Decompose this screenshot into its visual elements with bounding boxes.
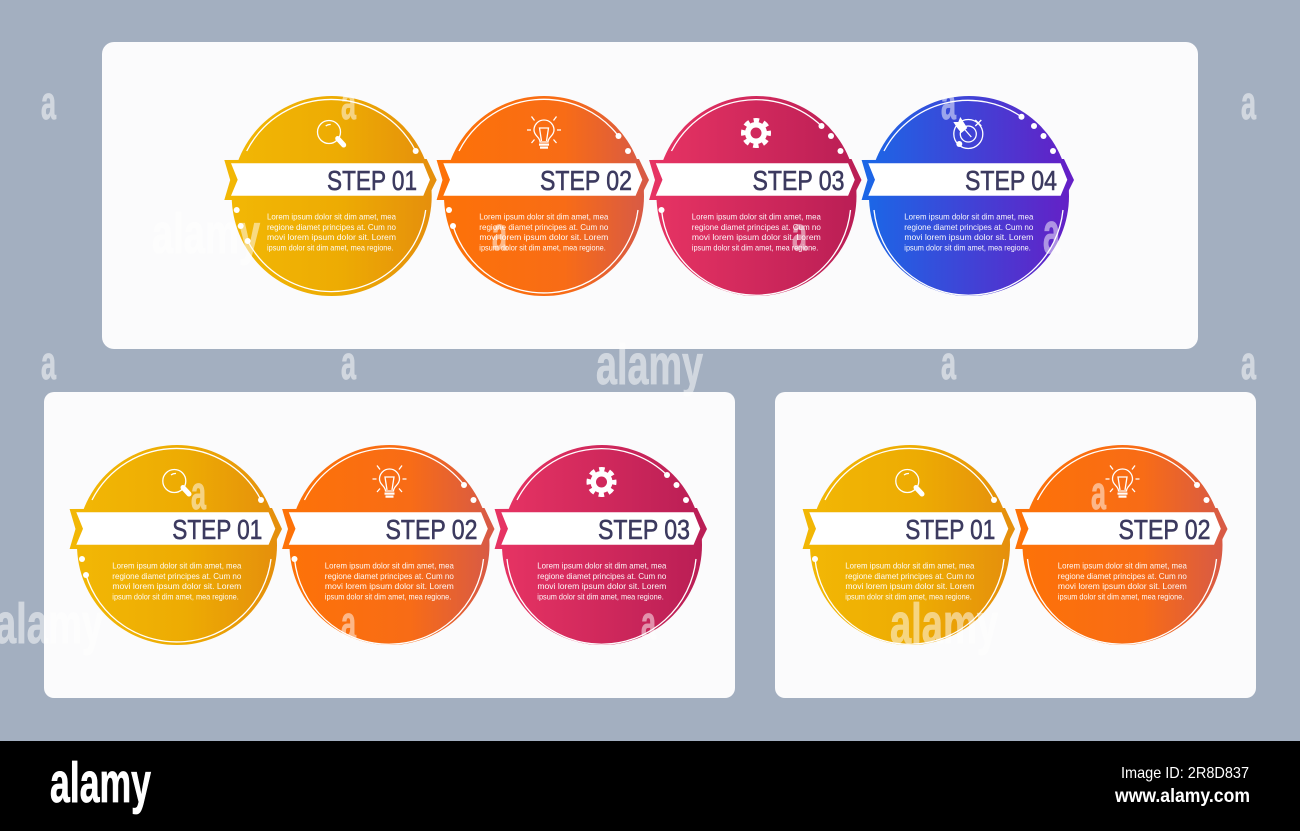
body text: ipsum dolor sit dim amet, mea regione. [845,592,972,602]
watermarks: alamy [152,202,260,266]
body text: regione diamet principes at. Cum no [692,223,821,232]
body text: ipsum dolor sit dim amet, mea regione. [267,244,394,252]
step label: STEP 02 [386,514,478,545]
step label: STEP 01 [905,514,995,545]
panel: two steps [775,392,1256,698]
footer logo: alamy [50,751,151,815]
body text: movi lorem ipsum dolor sit. Lorem [325,582,454,591]
step label: STEP 03 [598,514,690,545]
body text: regione diamet principes at. Cum no [845,572,975,581]
icon: light bulb [1106,466,1140,498]
step label: STEP 02 [1118,514,1210,545]
watermarks: a [341,336,356,389]
watermarks: a [191,466,206,519]
step label: STEP 01 [172,514,262,545]
body text: movi lorem ipsum dolor sit. Lorem [904,233,1033,242]
watermarks: a [1091,466,1106,519]
step 03 of three [495,445,707,645]
step 02 of four [437,96,649,296]
step 01 of four [224,96,437,296]
footer bar [0,741,1300,831]
step 04 of four [862,96,1074,296]
body text: movi lorem ipsum dolor sit. Lorem [537,582,666,591]
watermarks: a [341,76,356,129]
body text [904,212,1034,252]
body text: ipsum dolor sit dim amet, mea regione. [904,244,1031,252]
step label: STEP 04 [965,165,1057,196]
panel: three steps [44,392,735,698]
icon: light bulb [372,466,406,498]
body text: ipsum dolor sit dim amet, mea regione. [479,244,606,252]
watermarks: alamy [890,592,998,656]
body text [537,562,667,602]
watermarks: a [341,596,356,649]
body text: movi lorem ipsum dolor sit. Lorem [692,233,821,242]
body text: Lorem ipsum dolor sit dim amet, mea [692,212,821,222]
body text: Lorem ipsum dolor sit dim amet, mea [537,562,667,570]
body text: ipsum dolor sit dim amet, mea regione. [112,592,239,602]
watermarks: a [792,207,807,260]
watermarks: a [941,336,956,389]
watermarks: a [1043,201,1060,266]
step 01 of three [70,445,282,645]
watermarks: a [1241,76,1256,129]
step 02 of two [1015,445,1228,645]
step label: STEP 03 [752,165,844,196]
body text: ipsum dolor sit dim amet, mea regione. [325,592,451,602]
icon: gear [589,470,614,494]
body text [325,562,454,602]
body text [267,212,396,252]
watermarks: a [41,76,56,129]
body text: regione diamet principes at. Cum no [267,223,396,232]
body text: regione diamet principes at. Cum no [479,223,609,232]
watermarks: a [492,207,507,260]
body text: Lorem ipsum dolor sit dim amet, mea [904,212,1034,222]
body text: regione diamet principes at. Cum no [904,223,1034,232]
body text: regione diamet principes at. Cum no [1058,572,1187,581]
body text: movi lorem ipsum dolor sit. Lorem [1058,582,1187,591]
body text: regione diamet principes at. Cum no [325,572,454,581]
step label: STEP 02 [540,165,632,196]
icon: magnifier [163,470,189,494]
icon: target with arrow [953,117,983,148]
body text [479,212,609,252]
body text: movi lorem ipsum dolor sit. Lorem [267,233,396,242]
watermarks: a [41,336,56,389]
body text: movi lorem ipsum dolor sit. Lorem [845,582,974,591]
icon: magnifier [318,120,344,145]
watermarks: a [941,76,956,129]
icon: light bulb [527,116,561,149]
body text: ipsum dolor sit dim amet, mea regione. [1058,592,1184,602]
icon: gear [744,120,768,146]
body text [845,562,975,602]
body text: regione diamet principes at. Cum no [112,572,242,581]
body text: ipsum dolor sit dim amet, mea regione. [537,592,664,602]
body text: Lorem ipsum dolor sit dim amet, mea [1058,562,1187,570]
body text: ipsum dolor sit dim amet, mea regione. [692,244,818,252]
body text: Lorem ipsum dolor sit dim amet, mea [325,562,454,570]
watermarks [0,76,1256,656]
body text: Lorem ipsum dolor sit dim amet, mea [267,212,396,222]
body text: movi lorem ipsum dolor sit. Lorem [479,233,608,242]
icon: magnifier [896,470,922,494]
body text [692,212,821,252]
body text: Lorem ipsum dolor sit dim amet, mea [479,212,609,222]
body text [1058,562,1187,602]
image id: Image ID: 2R8D837 [1121,765,1249,782]
body text: Lorem ipsum dolor sit dim amet, mea [112,562,242,570]
step label: STEP 01 [327,165,417,196]
body text [112,562,242,602]
watermarks: a [641,596,656,649]
step 03 of four [649,96,862,296]
body text: Lorem ipsum dolor sit dim amet, mea [845,562,975,570]
step 01 of two [803,445,1015,645]
watermarks: a [1241,336,1256,389]
watermarks: alamy [596,333,703,397]
panel: four steps [102,42,1198,349]
step 02 of three [282,445,494,645]
website: www.alamy.com [1114,786,1250,807]
body text: regione diamet principes at. Cum no [537,572,667,581]
body text: movi lorem ipsum dolor sit. Lorem [112,582,241,591]
